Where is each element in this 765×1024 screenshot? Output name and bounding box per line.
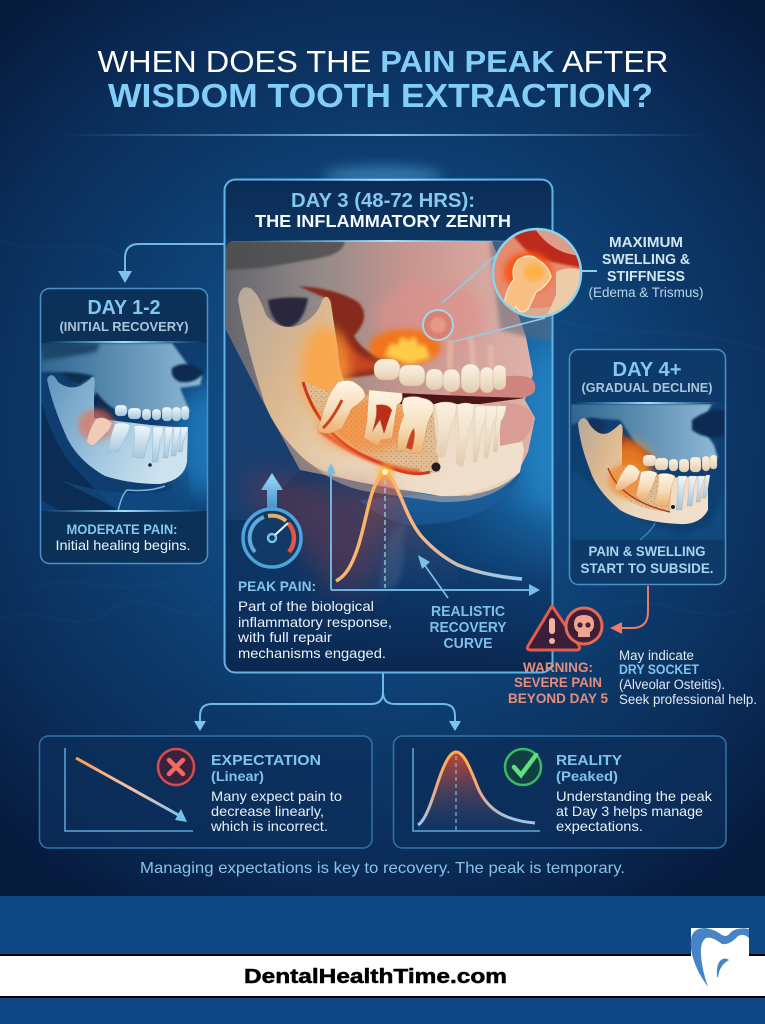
peak pain text: Part of the biological — [238, 598, 374, 614]
chart: linear expectation — [65, 748, 193, 831]
title: WISDOM TOOTH EXTRACTION? — [108, 77, 653, 114]
day 1-2 caption: MODERATE PAIN: — [66, 521, 178, 537]
connector: day 3 to day 1-2 — [118, 244, 224, 283]
reality text: expectations. — [556, 818, 643, 834]
lips — [399, 376, 536, 446]
panel heading: THE INFLAMMATORY ZENITH — [255, 211, 511, 231]
dry socket note: Seek professional help. — [619, 692, 757, 707]
footer banner — [0, 896, 765, 1024]
callout: maximum swelling: SWELLING & — [602, 252, 691, 268]
card: reality — [394, 736, 726, 848]
day 1-2 heading — [60, 297, 188, 334]
day 4+ caption: START TO SUBSIDE. — [580, 560, 714, 576]
reality text: REALITY — [556, 752, 622, 769]
warning text: BEYOND DAY 5 — [508, 690, 608, 706]
peak pain text: mechanisms engaged. — [238, 645, 386, 661]
warning text: SEVERE PAIN — [514, 674, 602, 690]
callout: maximum swelling: (Edema & Trismus) — [588, 285, 704, 300]
callout: maximum swelling: STIFFNESS — [607, 269, 685, 285]
chart: peaked reality — [413, 748, 540, 831]
day 1-2 heading: DAY 1-2 — [88, 297, 160, 319]
callout: maximum swelling — [588, 235, 704, 300]
warning text: WARNING: — [523, 659, 593, 675]
expectation text — [210, 752, 342, 834]
expectation text: decrease linearly, — [211, 803, 324, 819]
card: expectation — [40, 736, 372, 848]
panel: day 1-2 — [40, 288, 208, 564]
website name: DentalHealthTime.com — [244, 966, 507, 988]
day 4+ heading — [582, 359, 712, 395]
day 1-2 caption: Initial healing begins. — [56, 537, 190, 553]
logo: tooth — [691, 928, 749, 987]
reality text: Understanding the peak — [556, 788, 713, 804]
icon: cross — [158, 749, 194, 785]
day 1-2 caption — [56, 521, 190, 553]
inflamed cavity — [298, 286, 441, 380]
callout: maximum swelling: MAXIMUM — [609, 235, 683, 251]
expectation text: EXPECTATION — [211, 752, 321, 769]
connector: day 3 to comparison cards — [194, 673, 461, 731]
icon: warning triangle and skull — [527, 606, 602, 650]
chart label: RECOVERY — [430, 620, 507, 636]
peak pain text: PEAK PAIN: — [238, 578, 316, 594]
warning text — [508, 659, 608, 706]
reality text: at Day 3 helps manage — [556, 803, 703, 819]
jaw illustration: day 1-2 — [41, 343, 207, 511]
dry socket note: (Alveolar Osteitis). — [619, 677, 725, 692]
title: WHEN DOES THE PAIN PEAK AFTER — [98, 44, 668, 79]
peak pain text: with full repair — [237, 629, 332, 645]
day 4+ heading: (GRADUAL DECLINE) — [582, 380, 712, 395]
dry socket note: May indicate — [619, 648, 694, 663]
upper teeth — [374, 359, 506, 393]
panel: day 4+ — [569, 349, 726, 585]
closing message: Managing expectations is key to recovery. The peak is temporary. — [140, 860, 625, 877]
chart label: REALISTIC — [431, 604, 506, 620]
icon: pain gauge — [243, 509, 301, 567]
panel heading — [255, 190, 511, 231]
jaw illustration: day 4+ — [571, 404, 725, 540]
day 4+ caption: PAIN & SWELLING — [588, 543, 706, 559]
expectation text: Many expect pain to — [211, 788, 342, 804]
dry socket note: DRY SOCKET — [619, 662, 700, 677]
magnifier: inflamed wisdom tooth — [423, 229, 597, 342]
panel: day 3 inflammatory zenith — [224, 179, 597, 673]
day 4+ heading: DAY 4+ — [612, 359, 682, 381]
jaw illustration: day 3 — [226, 241, 575, 672]
day 4+ caption — [580, 543, 714, 576]
panel heading: DAY 3 (48-72 HRS): — [291, 190, 475, 212]
icon: check — [505, 749, 541, 785]
reality text: (Peaked) — [556, 768, 618, 784]
chart: realistic recovery curve — [326, 463, 540, 598]
expectation text: (Linear) — [211, 768, 264, 784]
warning arrow — [610, 586, 648, 634]
lower shading — [226, 500, 552, 672]
title — [98, 44, 668, 114]
expectation text: which is incorrect. — [210, 818, 328, 834]
gauge arrow — [261, 473, 283, 510]
peak pain text — [237, 578, 392, 661]
chart label — [430, 604, 507, 652]
peak pain text: inflammatory response, — [238, 614, 392, 630]
day 1-2 heading: (INITIAL RECOVERY) — [60, 319, 188, 334]
dry socket note — [619, 648, 757, 707]
lower teeth — [318, 380, 434, 454]
chart label: CURVE — [444, 636, 493, 652]
reality text — [556, 752, 713, 834]
